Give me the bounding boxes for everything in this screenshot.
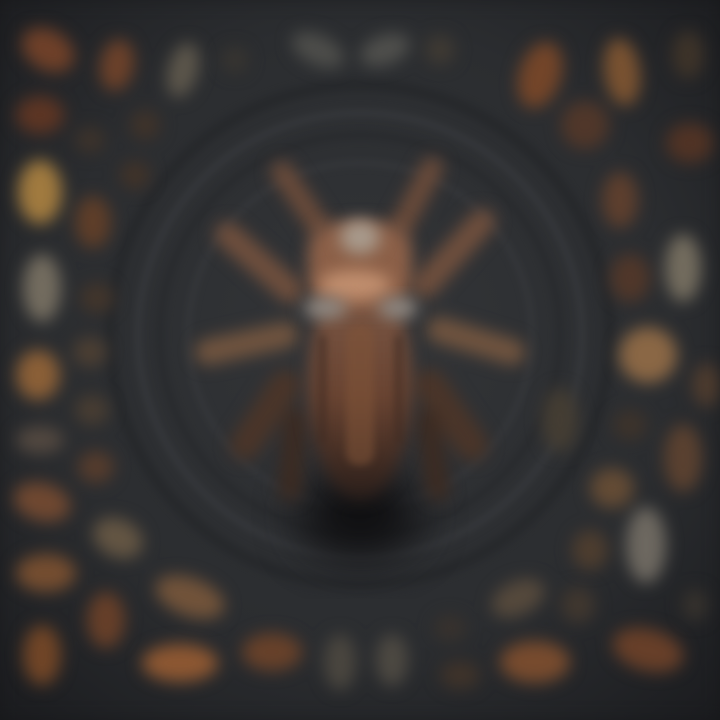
legs and antennae — [208, 168, 512, 490]
insects: right columns — [510, 31, 720, 621]
body stripes — [318, 325, 403, 465]
head highlight — [340, 220, 380, 254]
insects: bottom row — [142, 571, 688, 690]
central insect — [208, 168, 512, 557]
insects: left columns — [9, 19, 230, 685]
insects: top row — [222, 25, 455, 75]
concentric rings — [110, 85, 610, 585]
pale band — [303, 297, 418, 319]
thorax — [308, 222, 412, 307]
body — [308, 270, 412, 500]
orange glow — [319, 270, 391, 300]
shadow under insect — [300, 473, 420, 557]
